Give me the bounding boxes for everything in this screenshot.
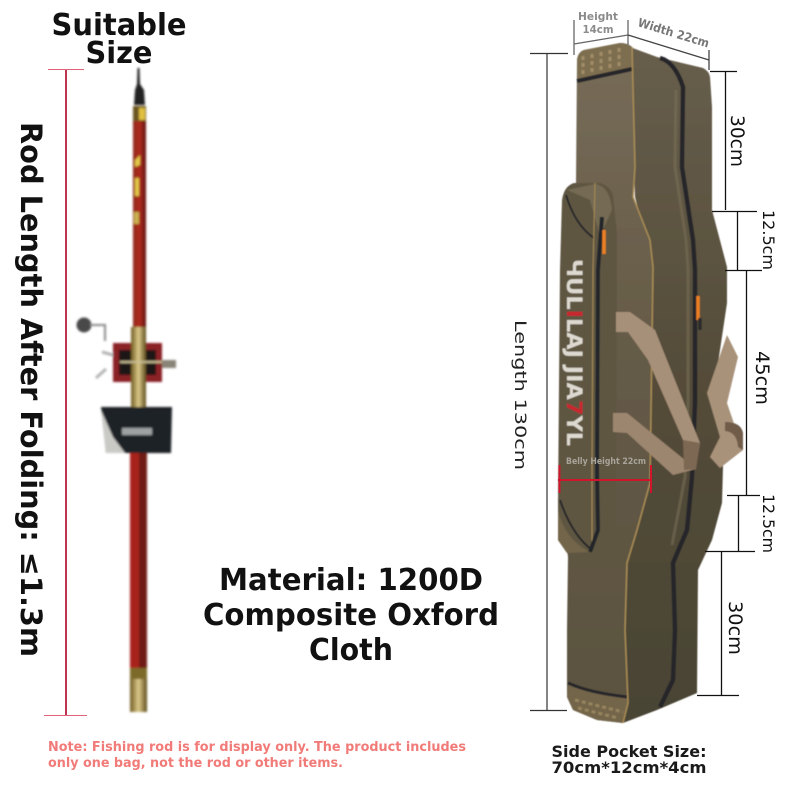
segment labels: 12.5cm — [759, 494, 778, 553]
material text: Composite Oxford — [203, 598, 499, 633]
bag front panel — [560, 43, 653, 723]
upper strap — [616, 312, 700, 470]
rod butt — [130, 678, 147, 712]
rod upper blank — [133, 121, 146, 331]
title: suitable size: Suitable — [52, 8, 186, 43]
reel spool — [113, 343, 131, 382]
material text — [203, 563, 499, 668]
pocket zipper — [590, 217, 602, 552]
segment labels: 12.5cm — [759, 210, 778, 270]
belly height marker: Belly Height 22cm — [566, 457, 646, 467]
rod length label: Rod Length After Folding: ≤1.3m — [14, 122, 48, 657]
bag side panel — [623, 47, 727, 723]
reel handle — [76, 318, 92, 332]
segment labels: 30cm — [726, 115, 748, 167]
fishing rod with reel — [76, 68, 176, 712]
gold seam — [623, 47, 653, 723]
title: suitable size — [52, 8, 186, 71]
width dimension: Width 22cm — [636, 15, 711, 51]
side pocket — [558, 183, 617, 555]
lower strap — [613, 413, 696, 475]
note — [48, 740, 466, 771]
side pocket size: 70cm*12cm*4cm — [552, 758, 706, 777]
material text: Material: 1200D — [219, 563, 483, 598]
belly height marker — [558, 457, 652, 493]
black pouch — [101, 407, 172, 453]
zipper pulls — [602, 230, 606, 254]
reel seat — [131, 327, 146, 407]
bottom grip — [567, 683, 628, 723]
rod tip — [134, 68, 145, 105]
segment labels: 30cm — [724, 601, 746, 655]
main zipper — [660, 58, 695, 707]
height dimension — [574, 10, 628, 55]
height dimension: Height — [578, 10, 618, 23]
right segment dimensions — [697, 72, 762, 696]
height dimension: 14cm — [582, 23, 614, 36]
note: Note: Fishing rod is for display only. The product includes — [48, 740, 466, 755]
title: suitable size: Size — [86, 36, 152, 71]
brand logo: ЧUL I LAJ JIA 7 YL — [562, 259, 586, 446]
back strap — [707, 335, 743, 468]
width dimension — [628, 15, 711, 70]
rod length dimension line — [44, 70, 87, 716]
fishing bag — [558, 43, 743, 723]
length dimension: Length 130cm — [511, 320, 530, 470]
top grip — [577, 43, 632, 82]
side pocket size — [552, 742, 706, 777]
segment labels: 45cm — [751, 351, 773, 405]
rod lower blank — [130, 453, 147, 678]
material text: Cloth — [309, 633, 393, 668]
side pocket size: Side Pocket Size: — [552, 742, 706, 761]
note: only one bag, not the rod or other items. — [48, 756, 343, 771]
segment labels — [724, 115, 778, 655]
length dimension — [511, 53, 568, 710]
